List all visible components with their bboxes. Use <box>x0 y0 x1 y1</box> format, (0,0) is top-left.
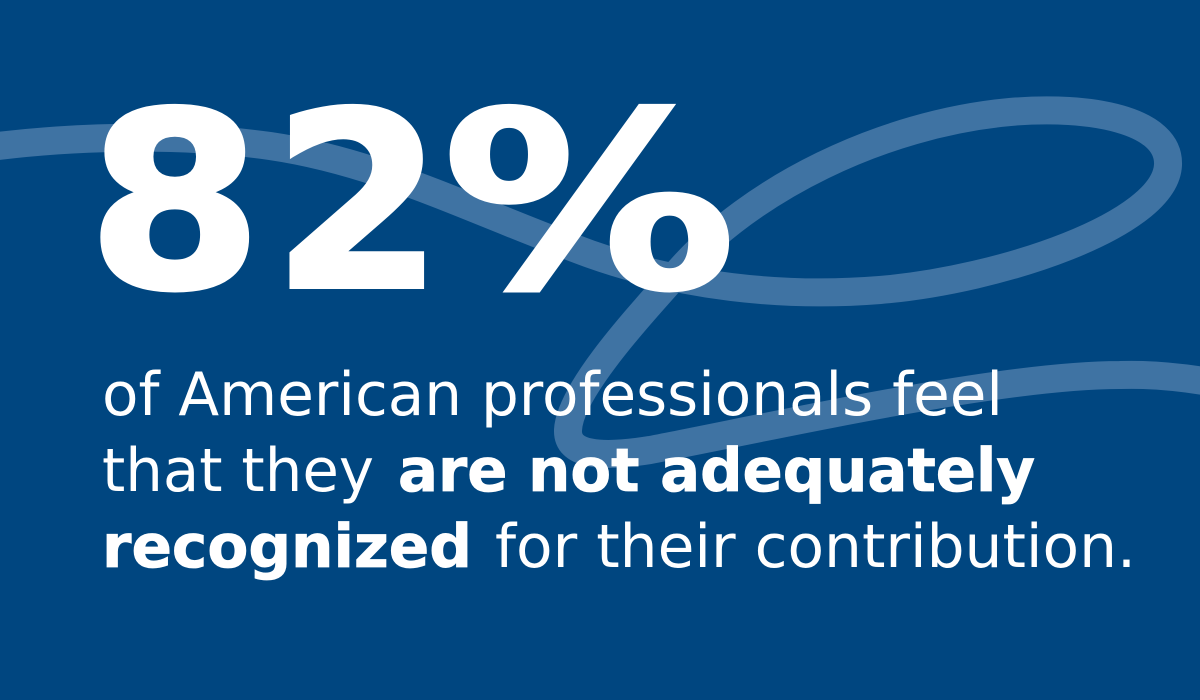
body text <box>102 360 1136 582</box>
digit 8: 8 <box>87 61 263 345</box>
digit 2: 2 <box>272 60 443 345</box>
line 2 bold: are not adequately <box>398 436 1035 506</box>
decorative swirl line <box>0 110 1200 454</box>
line 2 regular: that they <box>102 436 374 506</box>
line 3 regular: for their contribution. <box>495 512 1136 582</box>
percent sign: % <box>443 61 736 345</box>
headline statistic <box>87 60 736 345</box>
line 3 bold: recognized <box>102 512 472 582</box>
line 1: of American professionals feel <box>102 360 1003 430</box>
